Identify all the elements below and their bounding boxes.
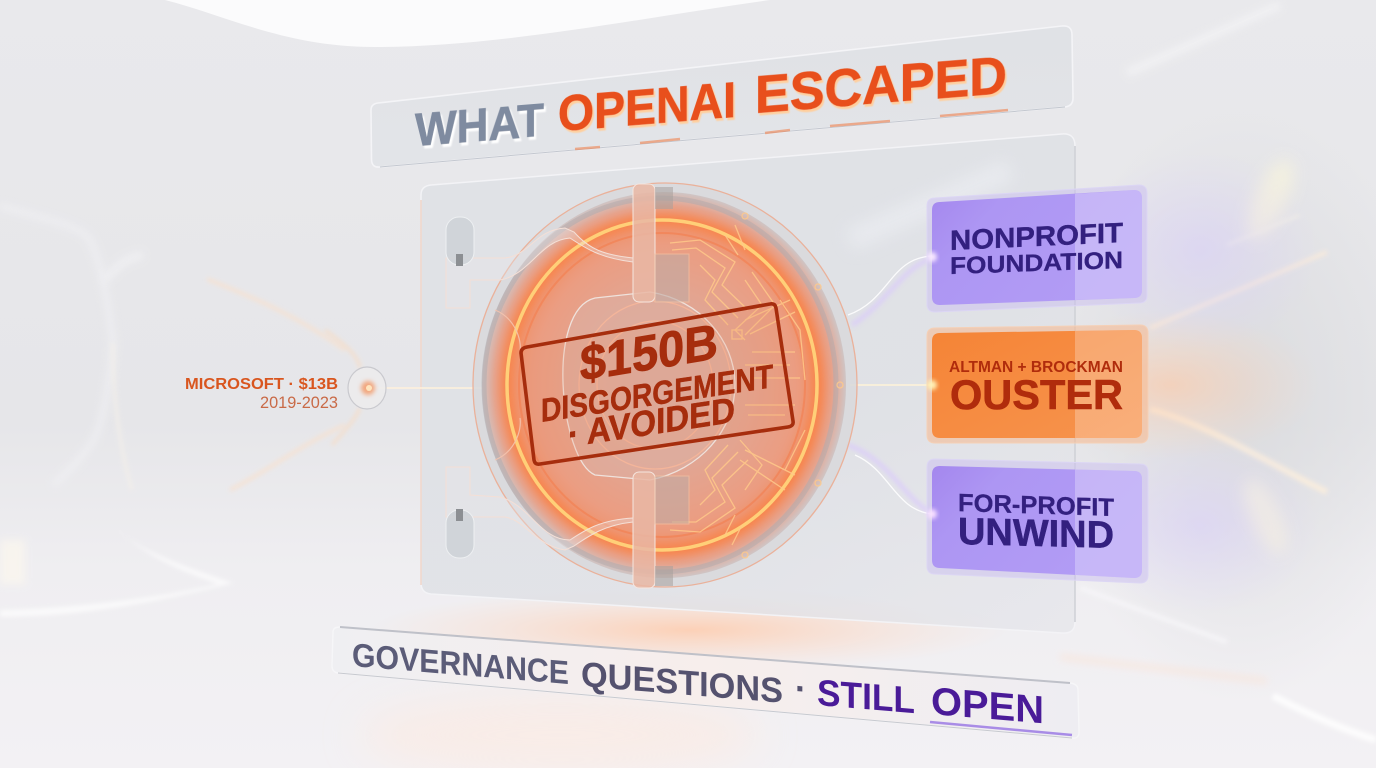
title word: OPENAI: OPENAI	[558, 72, 736, 142]
card glint	[927, 509, 937, 519]
card title line 2: FOUNDATION	[950, 247, 1123, 280]
circuit traces	[670, 213, 843, 558]
top left hinge	[446, 217, 633, 308]
footer words: questions: QUESTIONS	[581, 655, 783, 711]
card glint	[927, 380, 937, 390]
neon glow	[507, 220, 817, 550]
neon ring	[507, 220, 817, 550]
footer separator: ·	[795, 669, 807, 709]
vault disc	[482, 192, 846, 578]
secondary glow ring	[519, 233, 805, 537]
card title: OUSTER	[950, 371, 1123, 418]
footer words: still: STILL	[817, 671, 915, 721]
left door lobes	[495, 310, 520, 460]
footer bar	[332, 627, 1079, 738]
vault door	[446, 183, 857, 588]
card kicker: ALTMAN + BROCKMAN	[949, 359, 1123, 376]
card glint	[927, 252, 937, 262]
glass back panel	[421, 134, 1075, 633]
bottom centre hinge	[633, 472, 689, 588]
title bar	[371, 26, 1073, 167]
card title line 1: NONPROFIT	[950, 217, 1123, 256]
card: Altman + Brockman ouster	[927, 325, 1148, 443]
top centre hinge	[633, 184, 689, 302]
right output beam	[850, 382, 932, 388]
card: nonprofit foundation	[927, 185, 1147, 312]
inner hub	[563, 292, 735, 480]
bottom left hinge	[446, 467, 633, 558]
stamp line 1: DISGORGEMENT	[541, 358, 773, 430]
stamp amount: $150B	[580, 313, 718, 392]
left input beam	[365, 386, 495, 390]
label: Microsoft funding	[185, 376, 338, 412]
card: for-profit unwind	[927, 459, 1148, 583]
footer words: governance: GOVERNANCE	[352, 637, 569, 692]
card title: UNWIND	[958, 511, 1114, 557]
vault inner shade ring	[484, 198, 836, 572]
card kicker: FOR-PROFIT	[958, 489, 1114, 522]
lens rays	[207, 279, 360, 490]
footer words: open: OPEN	[931, 680, 1044, 732]
amount label: MICROSOFT · $13B	[185, 376, 338, 393]
stamp line 2: · AVOIDED	[568, 389, 735, 455]
vault outer rim	[473, 183, 857, 587]
stamp: $150B disgorgement avoided	[521, 304, 793, 464]
lens node	[348, 367, 386, 409]
date label: 2019-2023	[260, 393, 338, 412]
title word: ESCAPED: ESCAPED	[755, 46, 1007, 125]
connectors to cards	[848, 256, 932, 514]
title word: WHAT: WHAT	[415, 94, 544, 156]
